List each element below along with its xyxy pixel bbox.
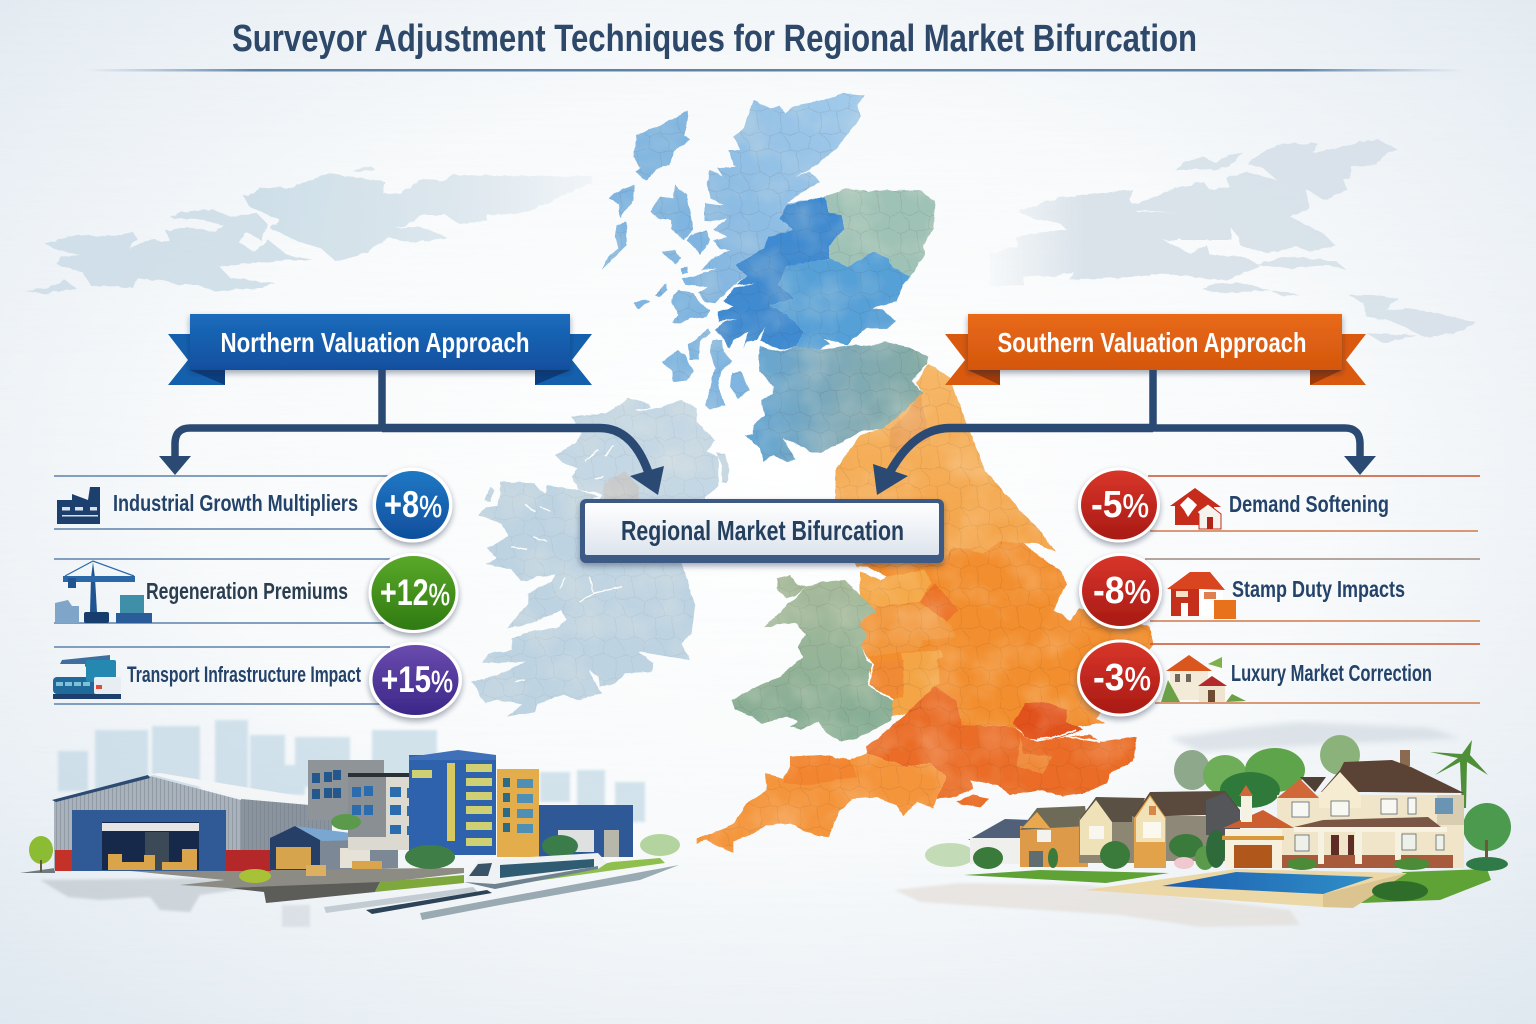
icon: transport <box>53 655 121 699</box>
badge: -3%: -3% <box>1093 657 1151 699</box>
badge: -8% <box>1079 553 1162 629</box>
scene: northern industrial cityscape <box>20 720 680 927</box>
arrows: northern connector <box>159 370 664 495</box>
label: Transport Infrastructure Impact: Transport Infrastructure Impact <box>127 662 361 687</box>
badge: -5% <box>1078 468 1160 542</box>
office buildings <box>308 750 633 857</box>
badge: -5%: -5% <box>1091 484 1149 526</box>
banner: Northern Valuation Approach <box>168 314 592 385</box>
map: Scotland <box>602 93 935 462</box>
row houses <box>968 791 1240 868</box>
label: Luxury Market Correction: Luxury Market Correction <box>1231 660 1432 686</box>
train <box>464 853 607 889</box>
badge: +12%: +12% <box>380 572 450 613</box>
panel: southern adjustments <box>1077 468 1480 716</box>
central box: Regional Market Bifurcation <box>580 499 944 563</box>
badge: +12% <box>368 553 458 633</box>
main house <box>1277 750 1464 868</box>
ground and reflections <box>20 858 679 927</box>
faded clouds and reflections <box>895 722 1460 927</box>
badge: +8%: +8% <box>384 484 442 525</box>
badge: +15% <box>369 642 462 718</box>
warehouse <box>29 773 333 872</box>
badge: +8% <box>372 468 452 542</box>
map: Wales <box>732 575 893 742</box>
badge: +15%: +15% <box>381 659 453 700</box>
label: Industrial Growth Multipliers: Industrial Growth Multipliers <box>113 490 358 516</box>
label: Stamp Duty Impacts: Stamp Duty Impacts <box>1232 576 1405 602</box>
central box: Regional Market Bifurcation: Regional Market Bifurcation <box>621 515 904 546</box>
label: Regeneration Premiums: Regeneration Premiums <box>146 578 348 604</box>
banner: Southern Valuation Approach <box>945 314 1366 385</box>
garage wing <box>1222 785 1294 868</box>
faded world map background <box>26 140 1477 343</box>
icon: house with demand symbol <box>1170 488 1221 529</box>
badge: -8%: -8% <box>1093 570 1151 612</box>
icon: luxury house <box>1161 655 1246 702</box>
arrows: southern connector <box>873 370 1376 495</box>
map: Ireland <box>472 398 730 717</box>
scene: southern residential houses <box>895 722 1511 927</box>
small shed <box>270 826 399 876</box>
title: Surveyor Adjustment Techniques for Regional Market Bifurcation <box>232 18 1197 60</box>
map: England <box>697 363 1154 853</box>
banner: Southern Valuation Approach: Southern Valuation Approach <box>998 327 1306 358</box>
lawns, deck and pool <box>964 857 1508 908</box>
skyline <box>58 720 645 822</box>
trees <box>925 735 1511 867</box>
icon: construction crane <box>55 561 152 623</box>
label: Demand Softening: Demand Softening <box>1229 491 1389 517</box>
panel: northern adjustments <box>53 468 462 718</box>
shrubs <box>239 814 680 883</box>
icon: house with stamp <box>1167 572 1236 619</box>
badge: -3% <box>1077 640 1163 716</box>
shrubs in front of row houses <box>973 830 1226 870</box>
banner: Northern Valuation Approach: Northern Valuation Approach <box>220 327 530 358</box>
icon: factory <box>57 487 100 524</box>
